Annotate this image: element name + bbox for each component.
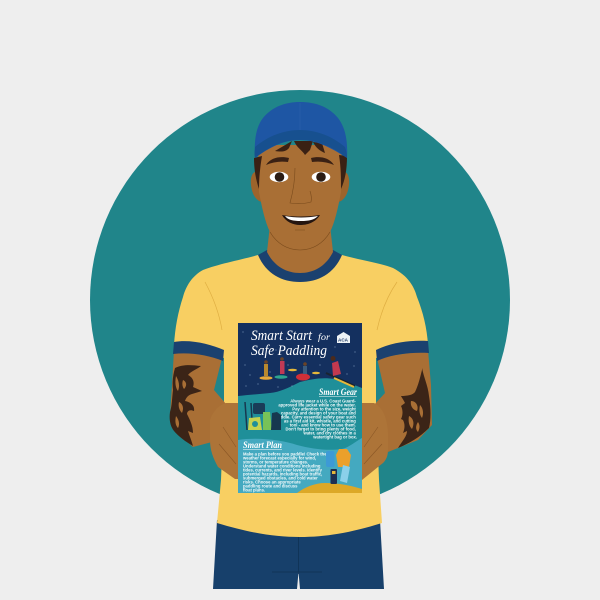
right arm tattoo <box>398 368 430 448</box>
poster title: Smart Start <box>251 328 313 344</box>
poster title: Safe Paddling <box>251 343 327 359</box>
blue cap <box>255 102 347 158</box>
smart gear text: as a first aid kit, whistle, and cutting <box>284 418 356 424</box>
smile <box>282 215 320 225</box>
logo: ACA <box>338 338 349 342</box>
shirt collar <box>258 250 342 282</box>
smart plan text: float plans. <box>243 488 265 492</box>
poster title <box>251 328 331 359</box>
eyebrows <box>266 157 334 165</box>
smart gear text: approved life jacket while on the water. <box>278 402 356 408</box>
smart gear text: Don't forget to bring plenty of food, <box>286 426 356 432</box>
smart gear text: paddle. Carry essential safety gear such <box>276 414 356 420</box>
smart plan text: storms, or temperature changes. <box>243 460 308 464</box>
gear icons <box>245 402 281 430</box>
teal background circle <box>90 90 510 510</box>
plan icons <box>326 449 351 484</box>
poster: Smart Start for Safe Paddling <box>238 323 362 493</box>
smart gear heading: Smart Gear <box>319 387 357 397</box>
right hand <box>360 403 388 480</box>
face <box>258 145 342 250</box>
poster page <box>238 323 362 493</box>
left arm tattoo <box>170 365 202 446</box>
lower blue panel <box>238 438 362 493</box>
trousers <box>213 520 384 589</box>
right arm <box>360 341 432 480</box>
smart gear text: Always wear a U.S. Coast Guard- <box>290 398 356 404</box>
left hand <box>210 403 240 479</box>
logo <box>337 332 350 343</box>
right sleeve cuff <box>376 341 429 361</box>
smart gear text: capacity, and design of your boat and <box>281 410 356 416</box>
right eye <box>312 172 330 182</box>
smart plan heading: Smart Plan <box>243 440 282 450</box>
night sky panel <box>238 323 362 396</box>
nose <box>290 168 311 204</box>
smart plan text: potential hazards, including boat traffic, <box>243 472 322 476</box>
yellow t-shirt <box>174 255 428 537</box>
neck <box>267 225 333 273</box>
smart gear text: water, and dry clothes in a <box>302 430 356 436</box>
poster title: for <box>318 332 331 342</box>
smart plan text: Understand water conditions including <box>243 464 321 468</box>
hair <box>254 141 347 189</box>
smart gear text: watertight bag or box. <box>312 434 357 440</box>
left arm <box>170 341 240 479</box>
ears <box>251 172 349 202</box>
sand mound <box>297 483 362 493</box>
person: paddler holding poster <box>170 102 432 589</box>
smart gear text: Pay attention to the size, weight <box>292 406 356 412</box>
smart gear text: tool - and know how to use them. <box>290 422 356 428</box>
left sleeve cuff <box>173 341 224 361</box>
head <box>251 102 349 250</box>
smart plan text: submerged obstacles, and cold water <box>243 476 318 480</box>
smart plan text: tides, currents, and river levels. Identify <box>243 468 323 472</box>
paddlers illustration <box>260 356 355 387</box>
stars <box>242 332 356 388</box>
smart plan text: paddling route and discuss <box>243 484 298 488</box>
smart plan text: risks. Choose an appropriate <box>243 480 301 484</box>
jaw line <box>270 230 330 250</box>
smart plan text: weather forecast especially for wind, <box>242 456 316 460</box>
left eye <box>270 172 288 182</box>
smart plan text: Make a plan before you paddle! Check the <box>243 452 327 456</box>
